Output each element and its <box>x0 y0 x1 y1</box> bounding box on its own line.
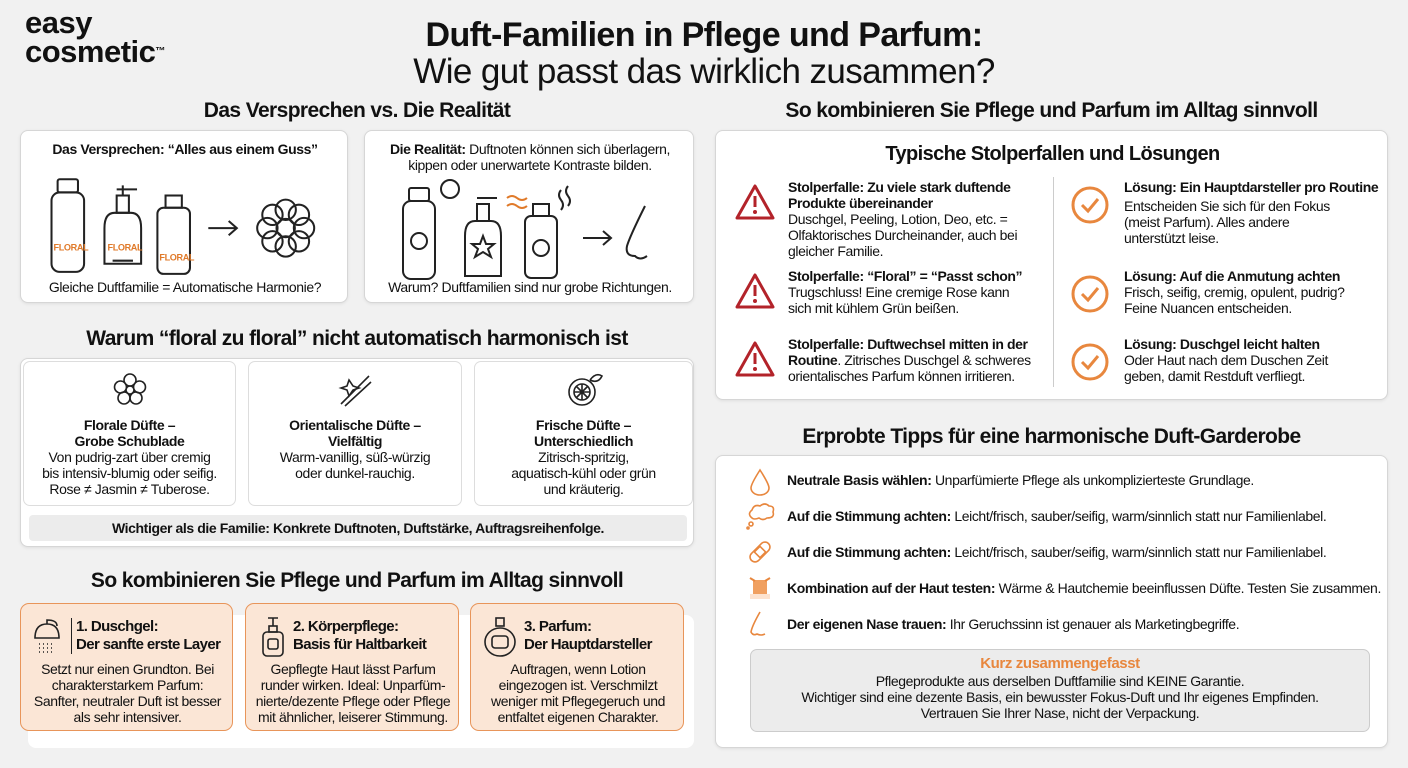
note bar: Wichtiger als die Familie: Konkrete Duftnoten, Duftstärke, Auftragsreihenfolge. <box>112 520 604 536</box>
tip 2: Auf die Stimmung achten: Leicht/frisch, sauber/seifig, warm/sinnlich statt nur Familienlabel. <box>787 508 1326 524</box>
card: florale Düfte: Grobe Schublade <box>75 433 184 449</box>
panel: Versprechen <box>20 130 348 303</box>
card: frische Düfte: Zitrisch-spritzig, <box>538 449 629 465</box>
solution 1 <box>1072 179 1378 246</box>
panel: Realität: Warum? Duftfamilien sind nur grobe Richtungen. <box>388 279 672 295</box>
summary box: Kurz zusammengefasst <box>980 655 1140 672</box>
title <box>413 16 995 91</box>
panel: Versprechen: Gleiche Duftfamilie = Automatische Harmonie? <box>49 279 321 295</box>
card: frische Düfte: und kräuterig. <box>543 481 624 497</box>
card: florale Düfte: bis intensiv-blumig oder seifig. <box>42 465 217 481</box>
icon: mixed bottles and nose <box>402 179 648 280</box>
card: orientalische Düfte <box>248 361 462 506</box>
tip 1 <box>750 468 1254 496</box>
pitfall 1: Stolperfalle: Zu viele stark duftende Produkte übereinander <box>788 179 1010 211</box>
tip 1: Neutrale Basis wählen: Unparfümierte Pflege als unkomplizierteste Grundlage. <box>787 472 1254 488</box>
card: Körperpflege: 2. Körperpflege: <box>293 618 398 635</box>
card: Duschgel: 1. Duschgel: <box>76 618 158 635</box>
panel: Stolperfallen <box>715 130 1388 400</box>
card: orientalische Düfte: Vielfältig <box>328 433 382 449</box>
card: orientalische Düfte: Orientalische Düfte – <box>289 417 421 433</box>
panel: Realität <box>364 130 694 303</box>
card: florale Düfte: Florale Düfte – <box>84 417 175 433</box>
panel: tips <box>715 455 1388 748</box>
card: florale Düfte: Von pudrig-zart über cremig <box>49 449 210 465</box>
panel: Realität: Die Realität: Duftnoten können sich überlagern, <box>390 141 670 157</box>
card: Körperpflege <box>245 603 459 731</box>
solution 3 <box>1072 336 1328 384</box>
logo <box>25 5 165 69</box>
panel: Stolperfallen: Typische Stolperfallen und Lösungen <box>885 143 1220 165</box>
card: florale Düfte: Rose ≠ Jasmin ≠ Tuberose. <box>49 481 210 497</box>
panel: families <box>20 358 694 547</box>
logo: easy <box>25 5 92 40</box>
heading: Warum floral zu floral: Warum “floral zu floral” nicht automatisch harmonisch ist <box>86 327 628 350</box>
summary box: Pflegeprodukte aus derselben Duftfamilie sind KEINE Garantie. <box>876 673 1244 689</box>
solution 3: Oder Haut nach dem Duschen Zeit geben, damit Restduft verfliegt. <box>1124 352 1328 384</box>
card: Parfum: weniger mit Pflegegeruch und <box>491 693 665 709</box>
card: Parfum: Der Hauptdarsteller <box>524 636 652 653</box>
tip 4 <box>750 577 1381 599</box>
card: Parfum <box>470 603 684 731</box>
card: Parfum: entfaltet eigenen Charakter. <box>498 709 658 725</box>
solution 2 <box>1072 268 1345 316</box>
card: Körperpflege: Gepflegte Haut lässt Parfum <box>270 661 436 677</box>
title: Duft-Familien in Pflege und Parfum: <box>425 16 983 54</box>
solution 1: Lösung: Ein Hauptdarsteller pro Routine <box>1124 179 1378 195</box>
tip 3 <box>749 541 1326 563</box>
heading: Erprobte Tipps: Erprobte Tipps für eine harmonische Duft-Garderobe <box>802 425 1301 448</box>
tip 3: Auf die Stimmung achten: Leicht/frisch, sauber/seifig, warm/sinnlich statt nur Familienlabel. <box>787 544 1326 560</box>
card: frische Düfte: Frische Düfte – <box>536 417 631 433</box>
card: Duschgel: Der sanfte erste Layer <box>76 636 220 653</box>
card: Körperpflege: runder wirken. Ideal: Unparfüm- <box>261 677 445 693</box>
note bar <box>29 515 687 541</box>
card: Körperpflege: mit ähnlicher, leiserer Stimmung. <box>258 709 448 725</box>
heading: Versprechen vs Realität: Das Versprechen vs. Die Realität <box>204 99 510 122</box>
solution 1: Entscheiden Sie sich für den Fokus (meist Parfum). Alles andere unterstützt leise. <box>1124 198 1330 246</box>
pitfall 2: Stolperfalle: “Floral” = “Passt schon” <box>788 268 1022 284</box>
pitfall 2 <box>736 268 1022 316</box>
card: Duschgel <box>20 603 233 731</box>
card: Duschgel: Sanfter, neutraler Duft ist besser <box>34 693 221 709</box>
icon: floral bottles: FLORAL <box>159 253 195 263</box>
card: Duschgel: als sehr intensiver. <box>74 709 181 725</box>
backdrop panel <box>28 615 694 748</box>
heading: So kombinieren (right): So kombinieren Sie Pflege und Parfum im Alltag sinnvoll <box>785 99 1318 122</box>
icon: floral bottles: FLORAL <box>54 242 89 252</box>
card: Parfum: Auftragen, wenn Lotion <box>510 661 646 677</box>
pitfall 3: Stolperfalle: Duftwechsel mitten in der Routine. Zitrisches Duschgel & schweres orientalisches Parfum können irritieren. <box>788 336 1031 384</box>
pitfall 2: Trugschluss! Eine cremige Rose kann sich mit kühlem Grün beißen. <box>788 284 1009 316</box>
heading: So kombinieren (left): So kombinieren Sie Pflege und Parfum im Alltag sinnvoll <box>91 569 623 592</box>
title: Wie gut passt das wirklich zusammen? <box>413 52 995 91</box>
summary box: Wichtiger sind eine dezente Basis, ein bewusster Fokus-Duft und Ihr eigenes Empfinden. <box>801 689 1319 705</box>
pitfall 1 <box>736 179 1017 259</box>
tip 4: Kombination auf der Haut testen: Wärme & Hautchemie beeinflussen Düfte. Testen Sie zusammen. <box>787 580 1381 596</box>
card: Parfum: 3. Parfum: <box>524 618 591 635</box>
icon: floral bottles: FLORAL <box>108 242 143 252</box>
card: frische Düfte: aquatisch-kühl oder grün <box>511 465 656 481</box>
card: frische Düfte <box>474 361 693 506</box>
card: orientalische Düfte: oder dunkel-rauchig. <box>295 465 415 481</box>
solution 2: Frisch, seifig, cremig, opulent, pudrig? Feine Nuancen entscheiden. <box>1124 284 1345 316</box>
pitfall 1: Duschgel, Peeling, Lotion, Deo, etc. = Olfaktorisches Durcheinander, auch bei gleicher Familie. <box>788 211 1017 259</box>
summary box <box>750 649 1370 732</box>
card: orientalische Düfte: Warm-vanillig, süß-würzig <box>280 449 430 465</box>
card: frische Düfte: Unterschiedlich <box>534 433 633 449</box>
card: Körperpflege: Basis für Haltbarkeit <box>293 636 426 653</box>
card: Duschgel: charakterstarkem Parfum: <box>52 677 203 693</box>
logo: cosmetic™ <box>25 34 165 69</box>
summary box: Vertrauen Sie Ihrer Nase, nicht der Verpackung. <box>921 705 1199 721</box>
tip 2 <box>746 503 1326 530</box>
icon: floral bottles <box>50 178 316 275</box>
tip 5 <box>750 612 1239 636</box>
panel: Realität: kippen oder unerwartete Kontraste bilden. <box>408 157 652 173</box>
solution 2: Lösung: Auf die Anmutung achten <box>1124 268 1340 284</box>
tip 5: Der eigenen Nase trauen: Ihr Geruchssinn ist genauer als Marketingbegriffe. <box>787 616 1239 632</box>
card: Körperpflege: nierte/dezente Pflege oder Pflege <box>256 693 450 709</box>
solution 3: Lösung: Duschgel leicht halten <box>1124 336 1320 352</box>
panel: Versprechen: Das Versprechen: “Alles aus einem Guss” <box>52 141 318 157</box>
card: Duschgel: Setzt nur einen Grundton. Bei <box>41 661 214 677</box>
card: florale Düfte <box>23 361 236 506</box>
card: Parfum: eingezogen ist. Verschmilzt <box>499 677 657 693</box>
